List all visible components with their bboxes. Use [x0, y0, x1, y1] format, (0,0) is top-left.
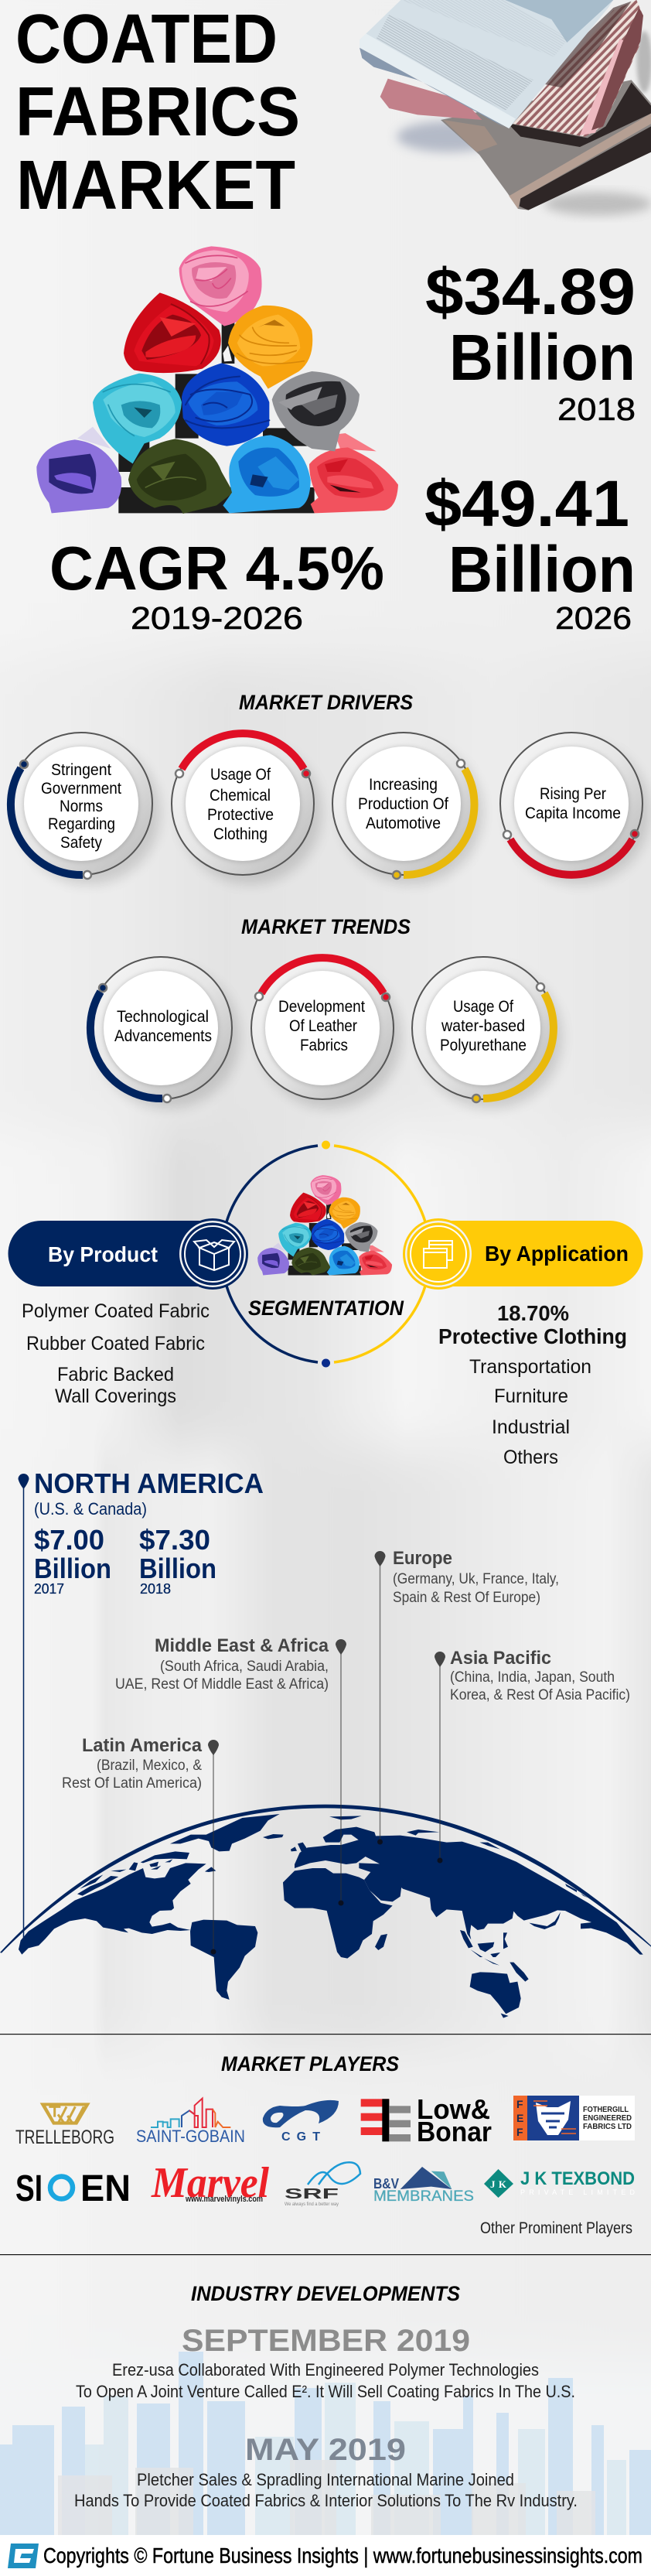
driver: rising per capita income [500, 733, 650, 884]
logo: srf: SRF [285, 2186, 339, 2202]
driver: production of automotive: Production Of [358, 795, 448, 813]
trend: leather fabrics: Fabrics [300, 1037, 348, 1054]
development: september 2019: Erez-usa Collaborated With Engineered Polymer Technologies [112, 2360, 539, 2380]
trend: leather fabrics: Development [278, 998, 365, 1016]
trend: leather fabrics: Of Leather [289, 1017, 357, 1035]
madagascar and asian islands [329, 1816, 588, 1982]
heading: market drivers: MARKET DRIVERS [239, 691, 413, 714]
eastern hemisphere [283, 1816, 643, 2018]
development: september 2019 [76, 2324, 575, 2401]
market size 2018: 2018 [557, 391, 636, 427]
logo: jk texbond: PRIVATE LIMITED [520, 2188, 636, 2196]
market size 2018: $34.89 [425, 255, 636, 328]
development: may 2019: Hands To Provide Coated Fabrics & Interior Solutions To The Rv Industry. [74, 2491, 578, 2510]
list: application segments: Protective Clothing [438, 1324, 627, 1348]
segmentation rolled fabric [257, 1175, 392, 1276]
region: latin america [62, 1735, 219, 1954]
logo: cgt: C G T [281, 2130, 320, 2144]
africa [283, 1868, 393, 1959]
driver: stringent government norms: Government [41, 780, 121, 798]
logo: marvel: www.marvelvinyls.com [185, 2195, 263, 2204]
trend: technological advancements: Advancements [114, 1027, 212, 1045]
list: application segments: 18.70% [497, 1301, 569, 1325]
heading: market trends: MARKET TRENDS [241, 915, 411, 938]
market size 2026 [424, 467, 636, 636]
CAGR [49, 534, 384, 636]
trend: water-based polyurethane: water-based [441, 1017, 525, 1035]
region: asia pacific: Korea, & Rest Of Asia Pacific) [450, 1687, 630, 1703]
list: product segments: Rubber Coated Fabric [26, 1333, 205, 1355]
logo: sioen: SI [15, 2168, 43, 2209]
driver: chemical protective clothing: Protective [207, 806, 274, 824]
logo: fothergill: F [516, 2126, 523, 2138]
logo: fothergill: E [516, 2112, 523, 2124]
map pin: north america [19, 1474, 29, 1938]
region: north america: (U.S. & Canada) [34, 1499, 147, 1519]
logo: fothergill [513, 2096, 635, 2140]
driver: stringent government norms: Norms [60, 798, 103, 815]
heading: industry developments: INDUSTRY DEVELOPMENTS [191, 2282, 460, 2305]
trend: technological advancements [90, 957, 240, 1109]
heading: segmentation: SEGMENTATION [248, 1297, 404, 1320]
region: north america: Billion [34, 1553, 111, 1584]
region: north america: 2018 [140, 1581, 171, 1597]
title: FABRICS [15, 73, 300, 151]
region: latin america: Latin America [82, 1735, 203, 1756]
logo: srf [285, 2162, 360, 2207]
logo: jk texbond [484, 2168, 636, 2198]
title: MARKET [16, 147, 295, 224]
trend: leather fabrics [251, 957, 401, 1109]
logo: trelleborg [15, 2103, 114, 2148]
driver: production of automotive [332, 733, 482, 884]
list: product segments: Wall Coverings [55, 1385, 176, 1407]
region: latin america: (Brazil, Mexico, & [97, 1758, 202, 1774]
market size 2026: 2026 [555, 600, 632, 636]
south america [190, 1920, 257, 2000]
pill: by application [403, 1218, 643, 1290]
logo: low and bonar: Low& [417, 2093, 490, 2125]
footer [0, 2535, 651, 2576]
driver: stringent government norms: Stringent [51, 761, 111, 779]
logo: sioen [15, 2168, 131, 2209]
region: middle east and africa: Middle East & Africa [155, 1635, 329, 1656]
region: middle east and africa [115, 1635, 346, 1906]
logo: jk texbond: J K TEXBOND [520, 2168, 635, 2189]
market size 2026: Billion [448, 533, 636, 606]
list: application segments: Others [503, 1447, 558, 1468]
development: may 2019 [74, 2433, 578, 2510]
globe arc [0, 1805, 651, 1953]
market size 2018 [425, 255, 636, 427]
logo: fothergill: ENGINEERED [583, 2114, 632, 2123]
heading: market players: MARKET PLAYERS [221, 2052, 399, 2075]
logo: fothergill: F [516, 2098, 523, 2110]
market size 2018: Billion [449, 321, 636, 394]
logo: cgt [263, 2100, 339, 2144]
driver: chemical protective clothing [172, 733, 322, 884]
driver: chemical protective clothing: Clothing [213, 825, 268, 843]
trend: water-based polyurethane [412, 957, 562, 1109]
logo: saint-gobain [136, 2099, 245, 2146]
region: asia pacific: (China, India, Japan, South [450, 1669, 615, 1686]
development: september 2019: To Open A Joint Venture Called E². It Will Sell Coating Fabrics In The U.S. [76, 2382, 575, 2401]
logo: fothergill: FABRICS LTD [583, 2123, 632, 2131]
eurasia [295, 1827, 643, 1955]
driver: rising per capita income: Rising Per [540, 785, 606, 803]
market size 2026: $49.41 [424, 467, 629, 540]
segmentation ring [222, 1140, 430, 1368]
pill: by product [9, 1218, 248, 1290]
region: europe: Spain & Rest Of Europe) [393, 1590, 540, 1606]
title: COATED [15, 1, 278, 78]
logo: srf: We always find a better way [285, 2202, 339, 2207]
region: middle east and africa: UAE, Rest Of Middle East & Africa) [115, 1676, 329, 1693]
list: application segments: Transportation [469, 1356, 591, 1378]
trend: water-based polyurethane: Usage Of [453, 998, 513, 1016]
list: application segments: Industrial [492, 1416, 570, 1438]
development: may 2019: Pletcher Sales & Spradling International Marine Joined [137, 2470, 514, 2489]
development: september 2019: SEPTEMBER 2019 [182, 2324, 470, 2358]
world map [0, 1805, 651, 2018]
logo: low and bonar: Bonar [417, 2116, 492, 2147]
list: product segments: Polymer Coated Fabric [22, 1300, 210, 1322]
driver: chemical protective clothing: Usage Of [210, 766, 271, 784]
logo: sioen: EN [80, 2168, 131, 2209]
north america [19, 1863, 206, 1955]
greenland [170, 1814, 280, 1851]
list: product segments: Fabric Backed [57, 1364, 174, 1385]
pill: by application: By Application [485, 1242, 629, 1266]
trend: technological advancements: Technological [117, 1008, 209, 1026]
driver: stringent government norms [10, 733, 160, 884]
arctic islands [77, 1851, 189, 1896]
logo: saint-gobain: SAINT-GOBAIN [136, 2127, 245, 2146]
city skyline [0, 2352, 651, 2535]
region: north america: $7.00 [34, 1524, 104, 1556]
towel photo [360, 0, 651, 215]
CAGR: CAGR 4.5% [49, 534, 384, 603]
region: middle east and africa: (South Africa, Saudi Arabia, [160, 1659, 329, 1675]
logo: trelleborg: TRELLEBORG [15, 2127, 114, 2148]
region: north america [34, 1467, 264, 1597]
driver: production of automotive: Automotive [366, 815, 441, 832]
logo: b and v membranes: MEMBRANES [373, 2188, 474, 2205]
driver: stringent government norms: Regarding [48, 815, 115, 833]
driver: chemical protective clothing: Chemical [210, 787, 271, 805]
icon: windows [424, 1241, 452, 1268]
region: north america: NORTH AMERICA [34, 1467, 264, 1499]
region: europe: Europe [393, 1548, 452, 1569]
region: asia pacific: Asia Pacific [450, 1648, 551, 1669]
north atlantic islands [205, 1834, 308, 1872]
list: product segments [22, 1300, 210, 1407]
development: may 2019: MAY 2019 [245, 2433, 406, 2467]
region: europe [374, 1548, 559, 1844]
trend: water-based polyurethane: Polyurethane [440, 1037, 527, 1054]
driver: stringent government norms: Safety [60, 834, 102, 852]
logo: fothergill: FOTHERGILL [583, 2106, 629, 2114]
logo: low and bonar [361, 2093, 492, 2147]
australia [470, 1972, 521, 2018]
pill: by product: By Product [48, 1242, 158, 1266]
region: north america: 2017 [34, 1581, 64, 1597]
rolled fabric pyramid [36, 246, 398, 514]
logo: marvel: Marvel [151, 2159, 269, 2207]
region: north america: $7.30 [139, 1524, 210, 1556]
driver: rising per capita income: Capita Income [525, 805, 621, 822]
region: europe: (Germany, Uk, France, Italy, [393, 1571, 559, 1587]
title [15, 1, 300, 224]
logo: jk texbond: JK [490, 2178, 507, 2190]
icon: fortune business insights logo [8, 2544, 39, 2568]
icon: open box [194, 1240, 234, 1270]
driver: production of automotive: Increasing [369, 776, 438, 794]
list: application segments [438, 1301, 627, 1468]
region: latin america: Rest Of Latin America) [62, 1775, 202, 1792]
region: asia pacific [435, 1648, 630, 1863]
CAGR: 2019-2026 [131, 600, 303, 636]
logo: b and v membranes: B&V [373, 2176, 399, 2192]
region: north america: Billion [139, 1553, 216, 1584]
list: application segments: Furniture [494, 1385, 568, 1407]
logo: b and v membranes [373, 2167, 474, 2205]
